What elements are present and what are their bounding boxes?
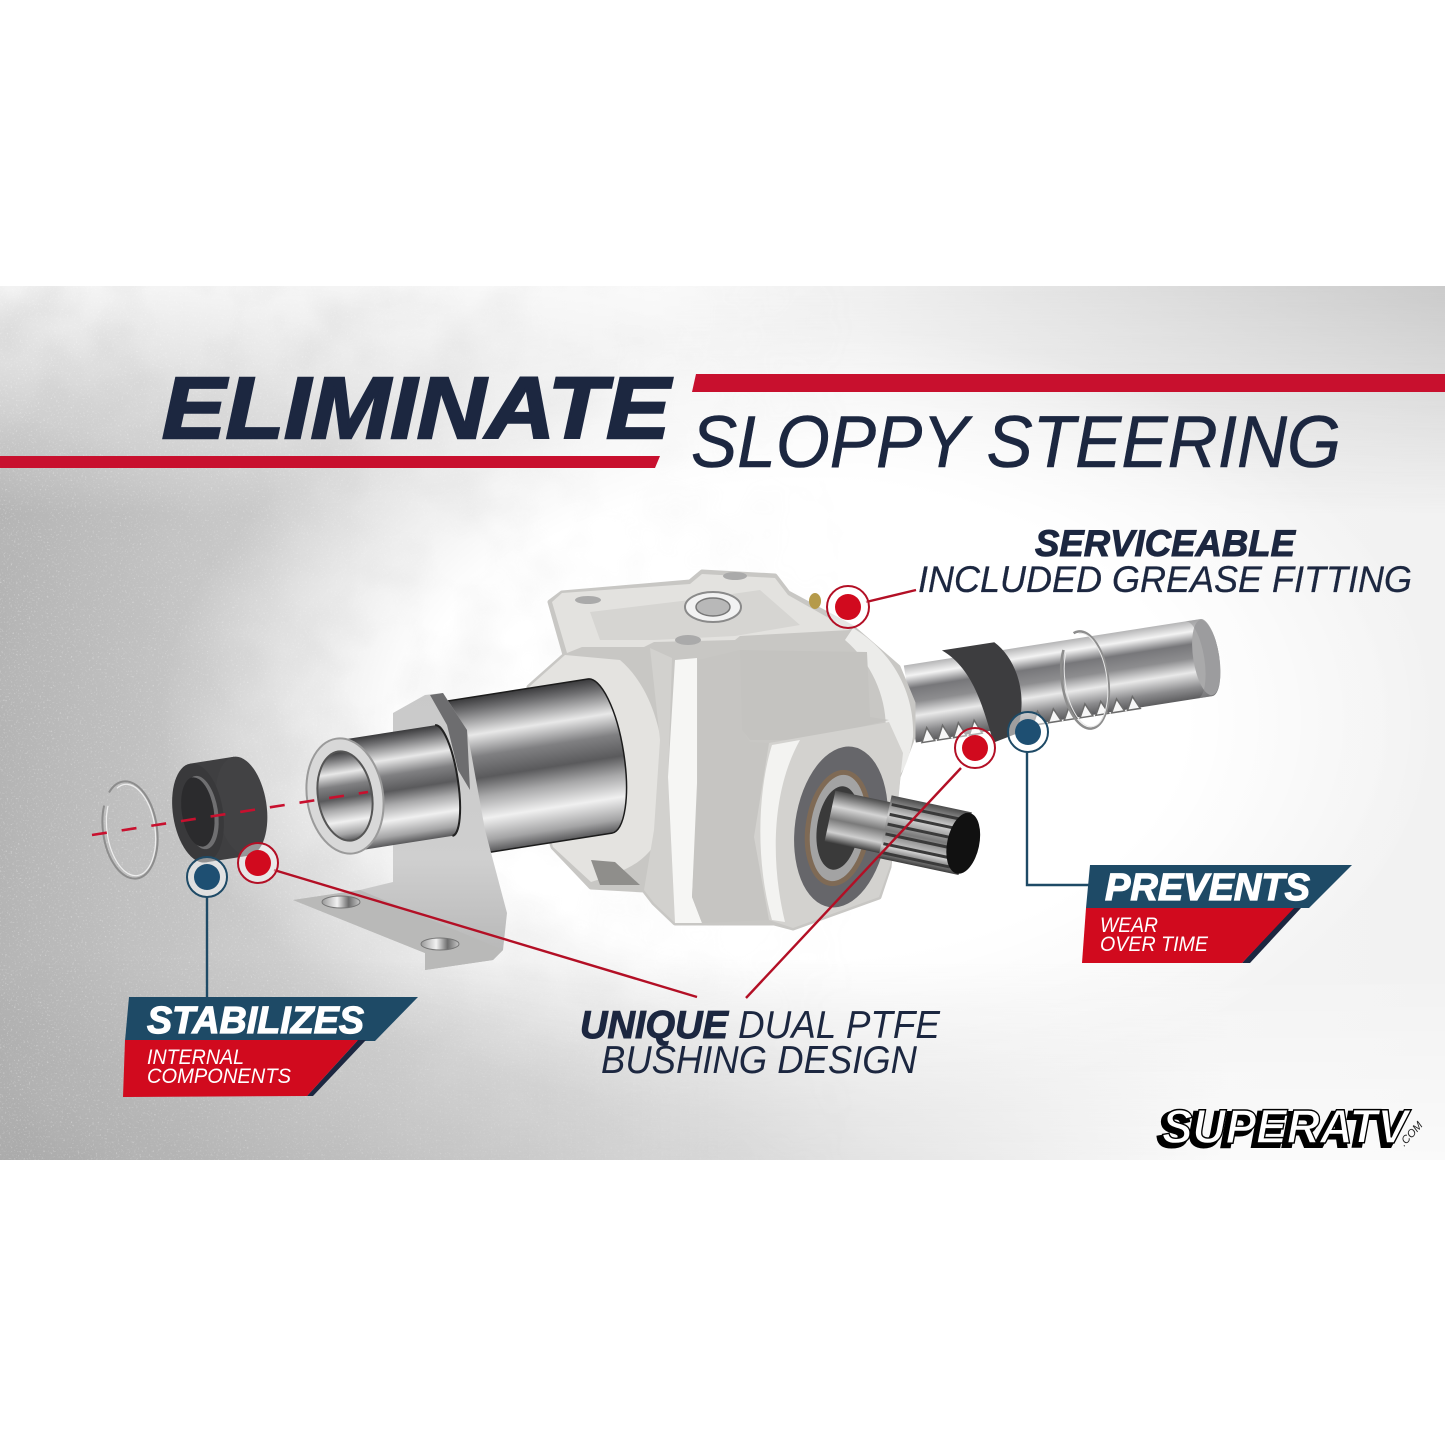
output spline shaft — [824, 784, 986, 878]
banner: navy sliver — [1242, 908, 1301, 963]
front corner highlight — [668, 658, 702, 923]
callout: stabilizes — [123, 857, 418, 1097]
right collar — [845, 628, 913, 777]
logo suffix: .COM — [1397, 1119, 1426, 1149]
ring clip: left — [96, 778, 164, 882]
callout: serviceable — [827, 523, 1412, 628]
top face inner — [590, 590, 800, 640]
banner: navy sliver — [307, 1040, 366, 1096]
callout: unique dual PTFE bushing — [238, 728, 995, 1082]
leader line: left bushing — [274, 870, 697, 997]
text: WEAR: WEAR — [1100, 914, 1158, 937]
top port — [685, 592, 741, 622]
logo wordmark: SUPERATV — [1162, 1101, 1412, 1154]
banner: blue — [125, 997, 418, 1041]
banner: red — [123, 1040, 358, 1097]
lower face — [754, 722, 903, 928]
bearing plate — [784, 740, 898, 914]
callout: prevents — [1008, 712, 1352, 963]
front steel tube — [298, 721, 467, 859]
main steel tube — [432, 675, 636, 858]
front left face — [644, 648, 675, 923]
banner: red — [1082, 908, 1294, 963]
text: OVER TIME: OVER TIME — [1100, 933, 1209, 956]
text: UNIQUE DUAL PTFE: UNIQUE — [580, 1004, 729, 1047]
bracket with mounting foot — [293, 693, 507, 970]
marker: grease fitting — [827, 586, 869, 628]
ring clip: right — [1055, 628, 1115, 732]
leader line — [206, 897, 208, 998]
text: INTERNAL: INTERNAL — [147, 1046, 244, 1069]
banner: blue — [1086, 865, 1352, 908]
text: STABILIZES: STABILIZES — [147, 1000, 364, 1042]
text: INCLUDED GREASE FITTING: INCLUDED GREASE FITTING — [918, 559, 1412, 600]
left flange — [529, 655, 665, 882]
housing body — [529, 572, 913, 928]
text: COMPONENTS: COMPONENTS — [147, 1065, 291, 1088]
top face — [552, 574, 850, 653]
text: UNIQUE DUAL PTFE: DUAL PTFE — [738, 1004, 941, 1047]
dashed axis line — [92, 792, 368, 835]
marker — [1008, 712, 1048, 752]
logo wordmark shadow: SUPERATV — [1158, 1104, 1408, 1157]
diagram: exploded rack assembly — [92, 572, 1225, 970]
leader line: right bushing — [746, 768, 961, 998]
rack teeth — [920, 695, 1140, 743]
heading: SLOPPY STEERING: SLOPPY STEERING — [691, 402, 1341, 483]
lower face highlight — [760, 740, 800, 922]
red bar: lower left — [0, 456, 660, 468]
text: PREVENTS: PREVENTS — [1105, 867, 1310, 909]
logo: SuperATV.com — [1158, 1101, 1426, 1157]
panel: textured gray background — [0, 286, 1445, 1160]
heading: ELIMINATE: ELIMINATE — [162, 360, 673, 457]
leader line — [866, 590, 916, 602]
right steel shaft — [904, 617, 1225, 744]
title: eliminate sloppy steering — [0, 360, 1445, 483]
foot shadow — [591, 860, 640, 885]
marker: left bushing — [238, 843, 278, 883]
bolt heads — [575, 596, 601, 604]
text: UNIQUE DUAL PTFE — [580, 1004, 941, 1047]
middle face — [692, 650, 769, 923]
grease fitting — [809, 593, 821, 609]
leader line — [1027, 752, 1090, 885]
marker — [187, 857, 227, 897]
bushing: left — [166, 753, 274, 866]
text: BUSHING DESIGN: BUSHING DESIGN — [601, 1039, 918, 1082]
right face panel — [740, 650, 889, 740]
text: SERVICEABLE: SERVICEABLE — [1035, 523, 1296, 564]
bushing: right — [942, 639, 1028, 748]
marker: right bushing — [955, 728, 995, 768]
red bar: upper right — [692, 374, 1445, 392]
